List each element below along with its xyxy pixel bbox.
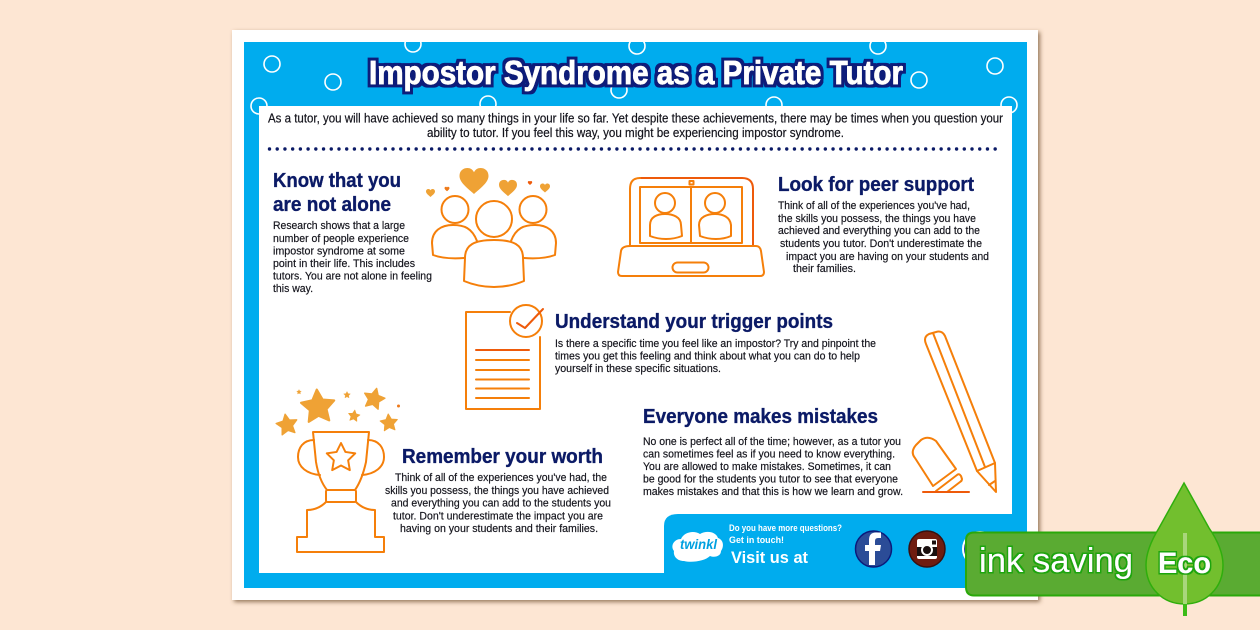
icon: facebook <box>856 531 892 567</box>
contact text: Do you have more questions? <box>729 523 842 534</box>
icon: laptop video call <box>618 178 764 276</box>
body text: times you get this feeling and think about what you can do to help <box>555 350 860 362</box>
body text: this way. <box>273 283 313 295</box>
body text: be good for the students you tutor to see that everyone <box>643 474 898 486</box>
body text: yourself in these specific situations. <box>555 363 721 375</box>
decorative ring pattern <box>251 36 1017 114</box>
body text: tutor. Don't underestimate the impact you are <box>393 510 603 522</box>
body text: the skills you possess, the things you have <box>778 213 976 225</box>
contact text <box>729 523 842 567</box>
heading: are not alone <box>273 194 391 216</box>
section: understand your trigger points <box>555 311 876 375</box>
body text: Think of all of the experiences you've had, the <box>395 472 607 484</box>
heading <box>273 170 401 216</box>
footer contact tab <box>664 514 1012 573</box>
body text <box>778 200 989 275</box>
introduction text: As a tutor, you will have achieved so many things in your life so far. Yet despite these achievements, there may be times when you question your <box>268 112 1003 126</box>
body text: impact you are having on your students and <box>786 251 989 263</box>
section: look for peer support <box>778 174 989 275</box>
introduction text: ability to tutor. If you feel this way, you might be experiencing impostor syndrome. <box>427 126 844 140</box>
body text: their families. <box>793 263 856 275</box>
banner label: ink saving <box>979 542 1133 580</box>
worksheet paper <box>232 30 1038 600</box>
body text: number of people experience <box>273 233 409 245</box>
section: everyone makes mistakes <box>643 406 903 498</box>
icon: instagram <box>909 531 945 567</box>
ink saving eco badge <box>966 483 1260 616</box>
body text <box>385 472 611 535</box>
body text: can sometimes feel as if you need to know everything. <box>643 448 895 460</box>
heading: Understand your trigger points <box>555 311 833 333</box>
body text: tutors. You are not alone in feeling <box>273 270 432 282</box>
title: Impostor Syndrome as a Private Tutor <box>369 54 903 91</box>
body text: Research shows that a large <box>273 220 405 232</box>
leaf <box>1146 483 1223 616</box>
icon: checklist document <box>466 305 543 409</box>
body text: Think of all of the experiences you've had, <box>778 200 970 212</box>
section: know that you are not alone <box>273 170 432 295</box>
dotted divider <box>270 147 1002 151</box>
body text: point in their life. This includes <box>273 258 415 270</box>
icon: pencil and eraser <box>913 332 996 492</box>
body text: No one is perfect all of the time; however, as a tutor you <box>643 436 901 448</box>
eco label: Eco <box>1158 547 1211 580</box>
heading: Remember your worth <box>402 446 603 468</box>
body text: skills you possess, the things you have achieved <box>385 485 609 497</box>
body text: achieved and everything you can add to the <box>778 225 980 237</box>
white content panel <box>259 106 1012 573</box>
body text <box>555 338 876 375</box>
body text: Is there a specific time you feel like an impostor? Try and pinpoint the <box>555 338 876 350</box>
contact text: Visit us at <box>731 548 808 567</box>
green banner <box>966 532 1260 596</box>
twinkl logo <box>672 532 723 562</box>
heading: Everyone makes mistakes <box>643 406 878 428</box>
blue frame <box>244 42 1027 588</box>
body text: and everything you can add to the students you <box>391 498 611 510</box>
contact text: Get in touch! <box>729 535 784 546</box>
body text: impostor syndrome at some <box>273 246 405 258</box>
twinkl logo: twinkl <box>680 537 717 552</box>
introduction text <box>268 112 1003 140</box>
icon: group of people with hearts <box>426 168 556 287</box>
body text: having on your students and their families. <box>400 523 598 535</box>
section: remember your worth <box>385 446 611 535</box>
body text: makes mistakes and that this is how we learn and grow. <box>643 486 903 498</box>
icon: website <box>963 532 997 566</box>
body text: You are allowed to make mistakes. Sometimes, it can <box>643 461 891 473</box>
body text <box>643 436 903 498</box>
body text: students you tutor. Don't underestimate the <box>780 238 982 250</box>
body text <box>273 220 432 295</box>
icon: trophy with stars <box>275 386 400 552</box>
heading: Know that you <box>273 170 401 192</box>
heading: Look for peer support <box>778 174 974 196</box>
